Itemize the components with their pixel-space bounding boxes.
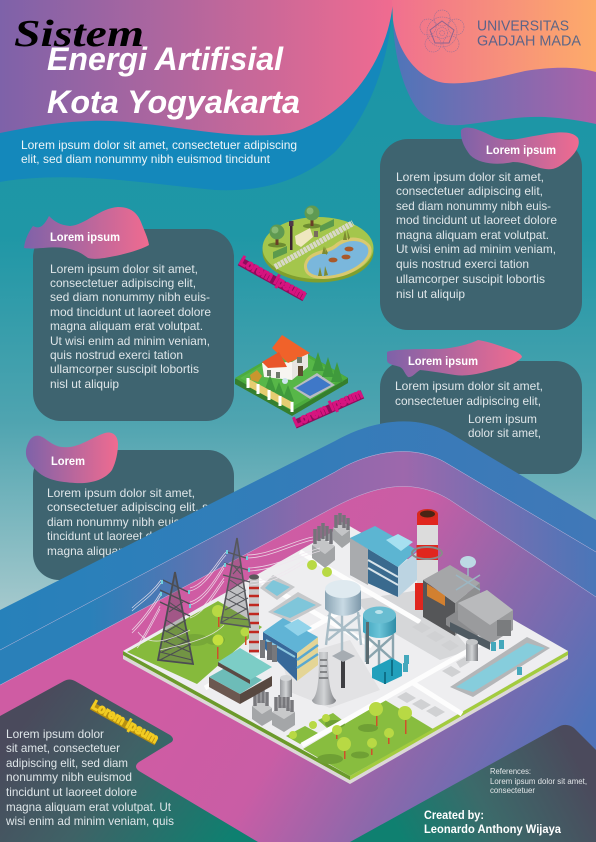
blue building: left [263,618,318,681]
body text: Lorem ipsum dolor sit amet, [396,170,544,184]
header blob: purple right [393,0,596,125]
panel: lower left: Lorem [51,454,85,468]
illustration: power plant [123,509,568,784]
body text [5,727,174,828]
body text: magna aliquam erat volutpat. Ut [6,800,172,814]
credit: Leonardo Anthony Wijaya [424,822,561,836]
icon: university seal [420,10,464,52]
band: purple chevron [0,452,596,842]
header blob: orange right [392,0,596,83]
body text: Lorem ipsum [468,412,537,426]
body text: consectetuer adipiscing elit, [396,184,543,198]
credit: Created by: [424,808,484,822]
logo wordmark: UNIVERSITAS [477,18,569,34]
intro text: Lorem ipsum dolor sit amet, consectetuer adipiscing [21,138,297,152]
green field: left [127,601,262,684]
references: Lorem ipsum dolor sit amet, [490,777,587,786]
badge: left [24,207,149,259]
badge: lower left [26,433,118,483]
house body [262,362,292,380]
body text: Lorem ipsum dolor [6,727,104,741]
label: house: Lorem ipsum [291,386,365,429]
white roads [205,552,505,745]
cooling stack [312,650,355,705]
striped chimney [249,574,259,653]
logo: Universitas Gadjah Mada [420,10,581,52]
panel: bottom left [0,680,258,842]
title: Kota Yogyakarta [47,84,300,120]
blue building: top [350,526,417,597]
credit [424,808,561,836]
body text: tincidunt ut laoreet dolore [47,529,178,543]
panel: left: Lorem ipsum [50,230,120,244]
body text [395,379,543,440]
pools [260,575,295,600]
body text: Lorem ipsum dolor sit amet, [47,486,195,500]
body text [47,486,222,558]
body text: ullamcorper suscipit lobortis [50,362,199,376]
red chimney [412,509,442,610]
plant base [123,651,568,784]
water tower: grey [325,580,361,652]
body text: consectetuer adipiscing elit, [395,394,541,408]
references: References: [490,767,531,776]
band: pink chevron [0,486,596,842]
badge: top right [461,128,579,169]
body text: sed diam nonummy nibh euis- [396,199,551,213]
body text: mod tincidunt ut laoreet dolore [50,305,211,319]
long pool [450,637,550,697]
panel: bottom right [350,725,596,842]
panel: left [24,207,234,421]
body text: ullamcorper suscipit lobortis [396,272,545,286]
trees and bench [268,242,286,248]
body text [396,170,557,301]
illustration: park [262,206,374,282]
label: bottom left: Lorem ipsum [89,697,161,746]
body text: Ut wisi enim ad minim veniam, [396,242,556,256]
body text: adipiscing elit, sed diam [6,756,128,770]
small cylinders [260,640,277,662]
references: consectetuer [490,786,535,795]
label: park: Lorem ipsum [237,253,309,302]
illustration: house [235,335,348,416]
body text [50,262,211,391]
substations [252,513,350,732]
header blob: blue [0,0,393,190]
body text: wisi enim ad minim veniam, quis [5,814,174,828]
body text: Lorem ipsum dolor sit amet, [395,379,543,393]
body text: magna aliquam erat volutpat. [396,228,549,242]
fan units [397,622,470,717]
panel: middle right [380,340,582,474]
body text: diam nonummy nibh euismod [47,515,203,529]
body text: dolor sit amet, [468,426,541,440]
body text: mod tincidunt ut laoreet dolore [396,213,557,227]
green field: bottom [303,700,433,776]
logo wordmark [477,18,581,50]
body text: magna aliquam erat volutpat. [50,319,203,333]
blue pumps [372,658,402,684]
body text: sed diam nonummy nibh euis- [50,290,210,304]
body text: quis nostrud exerci tation [396,257,529,271]
trees [212,560,412,759]
band: outer blue chevron [0,421,596,842]
intro text [21,138,297,166]
grey factory [423,556,513,650]
body text: sit amet, consectetuer [6,741,120,755]
transmission tower: right [221,538,250,627]
body text: Lorem ipsum dolor sit amet, [50,262,198,276]
panel: middle right: Lorem ipsum [408,354,478,368]
conifers [312,352,324,371]
teal factory [209,648,272,704]
body text: consectetuer adipiscing elit, [50,276,196,290]
body text: consectetuer adipiscing elit, sed [47,500,222,514]
badge: middle right [387,340,522,377]
insulators [160,550,250,608]
pool [293,373,335,399]
intro text: elit, sed diam nonummy nibh euismod tincidunt [21,152,271,166]
body text: Ut wisi enim ad minim veniam, [50,334,210,348]
title: Energi Artifisial [47,41,284,77]
panel: top right [380,128,582,330]
fence and dog house [247,378,292,410]
band edge lines [0,452,596,685]
water tower: blue [363,606,396,670]
drums and tank [280,639,522,697]
pond [304,238,372,279]
power lines [132,537,320,650]
body text: quis nostrud exerci tation [50,348,183,362]
references [490,767,587,795]
stone path [275,223,353,267]
body text: nisl ut aliquip [50,377,119,391]
title [14,13,300,120]
panel: lower left [26,433,234,580]
body text: magna aliquam erat volutpat. [47,544,200,558]
grey shadow areas [355,590,470,660]
logo wordmark: GADJAH MADA [477,34,581,50]
panel: top right: Lorem ipsum [486,143,556,157]
body text: nonummy nibh euismod [6,770,132,784]
header blob: pink gradient [0,0,393,135]
title: Sistem [14,13,144,55]
body text: tincidunt ut laoreet dolore [6,785,137,799]
body text: nisl ut aliquip [396,287,465,301]
transmission tower: left [158,572,193,664]
